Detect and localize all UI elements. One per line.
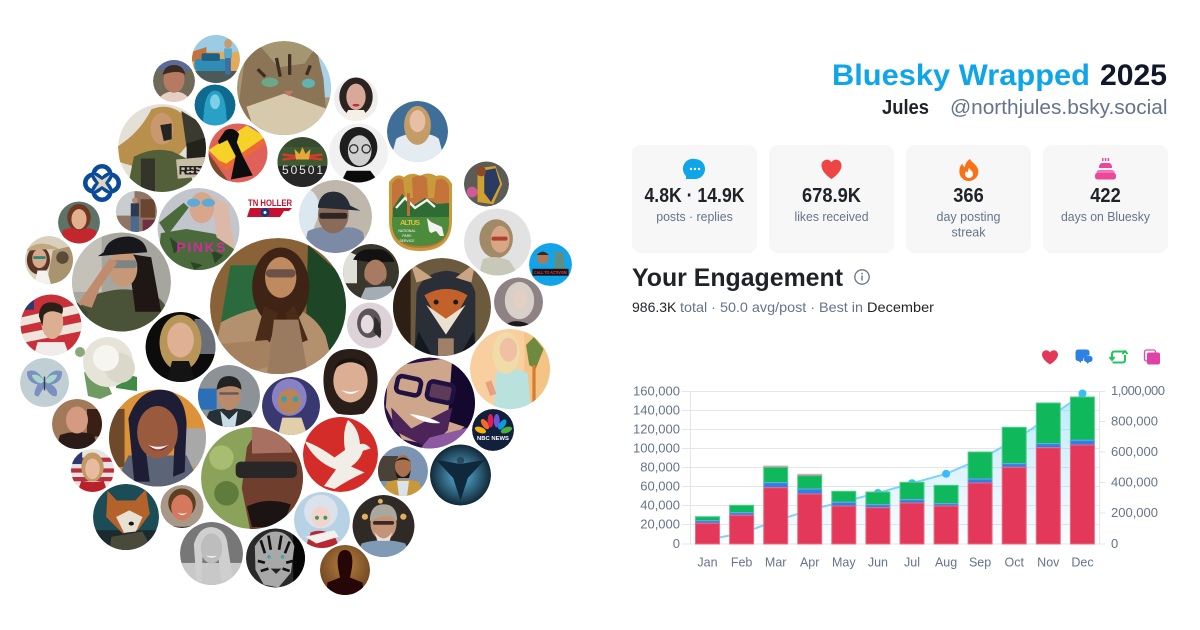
avatar: woman on green chair [210,238,346,374]
icon: cake [1095,158,1116,180]
icon: info [855,270,869,284]
bars: February [730,505,754,544]
left axis labels: 120,000 [633,422,680,436]
month labels: Nov [1037,556,1060,570]
panel: posts and replies stat: posts · replies [656,209,733,224]
month labels: Oct [1004,556,1024,570]
icon: flame [959,159,978,181]
avatar: tabby cat [237,41,331,135]
month labels: May [832,556,856,570]
left axis labels: 160,000 [633,384,680,398]
avatar: bearded man in yellow blazer [378,446,428,496]
badge: Alt US National Park Service [389,174,452,251]
left axis labels: 80,000 [640,460,680,474]
month labels: Sep [969,556,991,570]
logo: TN Holler [247,198,292,217]
right axis labels [1111,383,1165,551]
user name and handle: @northjules.bsky.social [950,97,1168,119]
chart: monthly engagement stacked bars with cumulative line [633,383,1165,570]
bars: August [934,485,958,544]
bars: September [968,452,992,544]
cumulative line [708,394,1082,540]
avatar: Call to Activism podcast: CALL TO ACTIVISM [534,270,567,275]
avatar: smiling woman with black hair [109,390,208,486]
cumulative area [708,394,1082,544]
icon: replies legend [1076,350,1092,364]
avatar: smiling brunette [323,349,378,415]
bars: April [798,474,822,544]
bars: July [900,482,924,544]
avatar: Call to Activism podcast [529,243,572,286]
month labels: Jun [868,556,888,570]
badge: Alt US National Park Service: SERVICE [399,239,415,243]
title: 2025 [1100,59,1167,92]
avatar: woman with blue car [192,35,240,83]
avatar: doll character [262,377,320,435]
avatar: comic hero [464,162,509,206]
badge: Alt US National Park Service: PARK [402,234,412,238]
avatar: woman with green glasses and sun hat [25,236,73,284]
panel: posting streak stat: day posting [936,209,1000,224]
left axis labels: 20,000 [640,516,680,532]
icon: blue four-ring logo [85,166,119,200]
avatar: woman with short hair [160,485,204,528]
left axis labels: 60,000 [640,478,680,494]
avatar: man in cap at window [299,180,372,253]
panel: likes received stat: likes received [794,209,868,224]
panel: likes received stat: 678.9K [802,185,862,207]
avatar: blonde soldier with Resist sign [118,104,209,192]
panel: likes received stat [769,145,894,253]
title: Bluesky Wrapped [832,59,1090,92]
avatar: 50501 badge: 50501 [282,163,323,177]
right axis labels: 600,000 [1111,444,1158,459]
engagement summary [632,299,934,315]
heading: Your Engagement: Your Engagement [632,264,844,292]
month labels: Mar [765,556,786,570]
avatar: woman in camo PINKS hoodie [158,188,240,270]
avatar: bald man [52,399,102,449]
month labels: Dec [1071,556,1094,570]
avatar: sketch of woman [347,302,393,348]
right axis labels: 0 [1111,536,1118,551]
left axis labels: 100,000 [633,440,680,456]
avatar: 50501 badge [278,137,328,187]
avatar: black and white blonde woman [180,522,243,585]
panel: days on Bluesky stat [1043,145,1168,253]
avatar: saluting woman in green jacket [72,232,171,332]
avatar: rainbow silhouette dancer [208,124,268,182]
month labels: Apr [800,556,819,570]
bars: December [1070,397,1094,544]
avatar: white dove on red [303,417,378,492]
icon: heart [822,160,842,179]
right axis labels: 800,000 [1111,414,1158,428]
right axis labels: 400,000 [1111,474,1158,490]
bars: November [1036,403,1060,544]
avatar: pale blonde woman [494,278,543,326]
panel: posts and replies stat [632,145,757,253]
month labels: Jul [904,556,920,570]
avatar: anime elf [294,492,350,548]
avatar: blue hooded figure [194,84,236,126]
bars: March [764,466,788,544]
avatar: woman in camo PINKS hoodie: PINKS [176,239,226,255]
avatar: tiger [246,528,305,588]
avatar: woman with flag background [71,449,114,492]
icon: chat bubble [683,159,705,179]
month labels: Feb [731,556,752,570]
avatar: man outdoors [153,60,195,102]
avatar: man with flag [20,294,82,356]
avatar: crystal butterfly [20,358,69,407]
avatar: man in sunglasses with foliage [201,426,303,529]
right axis labels: 1,000,000 [1111,383,1165,398]
right axis labels: 200,000 [1111,505,1158,520]
badge: Alt US National Park Service: NATIONAL [398,229,416,233]
avatar: woman with red glasses on grey [464,208,531,276]
avatar: woman in room [116,191,157,232]
avatar: woman with red lipstick [334,77,378,121]
avatar: NBC News [472,409,514,451]
engagement summary: 986.3K [632,299,677,315]
icon: quotes legend [1144,350,1160,364]
panel: posting streak stat: streak [952,225,986,240]
panel: days on Bluesky stat: days on Bluesky [1061,209,1150,224]
avatar: grey-haired man with glasses [352,495,414,557]
left axis labels [633,384,680,551]
avatar: blonde on black [146,312,216,382]
avatar: silhouette placeholder [320,545,370,595]
icon: white rose [75,337,137,399]
bars: January [696,517,720,544]
avatar: NBC News: NBC NEWS [477,436,509,442]
month labels: Jan [697,556,718,570]
bars: October [1002,427,1026,544]
avatar: bearded man with dark glasses [384,358,475,448]
avatar: woman in red top [58,202,100,244]
icon: reposts legend [1110,351,1128,362]
panel: posting streak stat: 366 [953,185,984,207]
avatar: fox in hood [393,258,491,356]
left axis labels: 140,000 [633,402,680,418]
panel: avatar bubble cluster [20,35,572,595]
bars: May [832,491,856,544]
logo: TN Holler: TN HOLLER [248,198,292,209]
bars: June [866,492,890,544]
avatar: shiba inu [93,484,159,550]
badge: Alt US National Park Service: ALTUS [400,218,420,227]
avatar: blonde soldier with Resist sign: RESIST [179,163,206,177]
user name and handle: Jules [882,97,929,119]
panel: posting streak stat [906,145,1031,253]
month labels: Aug [935,556,957,570]
chart legend [1042,350,1160,364]
avatar: man with glasses [198,365,260,427]
icon: heart legend [1042,350,1058,364]
engagement summary: December [867,299,934,315]
avatar: cowboy in truck [343,244,399,300]
panel: days on Bluesky stat: 422 [1090,185,1121,207]
avatar: blonde in white fur coat [387,101,448,162]
line points [874,390,1086,497]
avatar: blue winged figure [430,444,491,506]
left axis labels: 0 [673,536,680,551]
left axis labels: 40,000 [640,498,680,512]
month labels [697,556,1094,570]
avatar: black and white woman with glasses [329,124,388,182]
avatar: blonde in peach room [470,329,550,409]
engagement summary: total · 50.0 avg/post · Best in [680,299,863,315]
panel: posts and replies stat: 4.8K · 14.9K [644,185,745,207]
